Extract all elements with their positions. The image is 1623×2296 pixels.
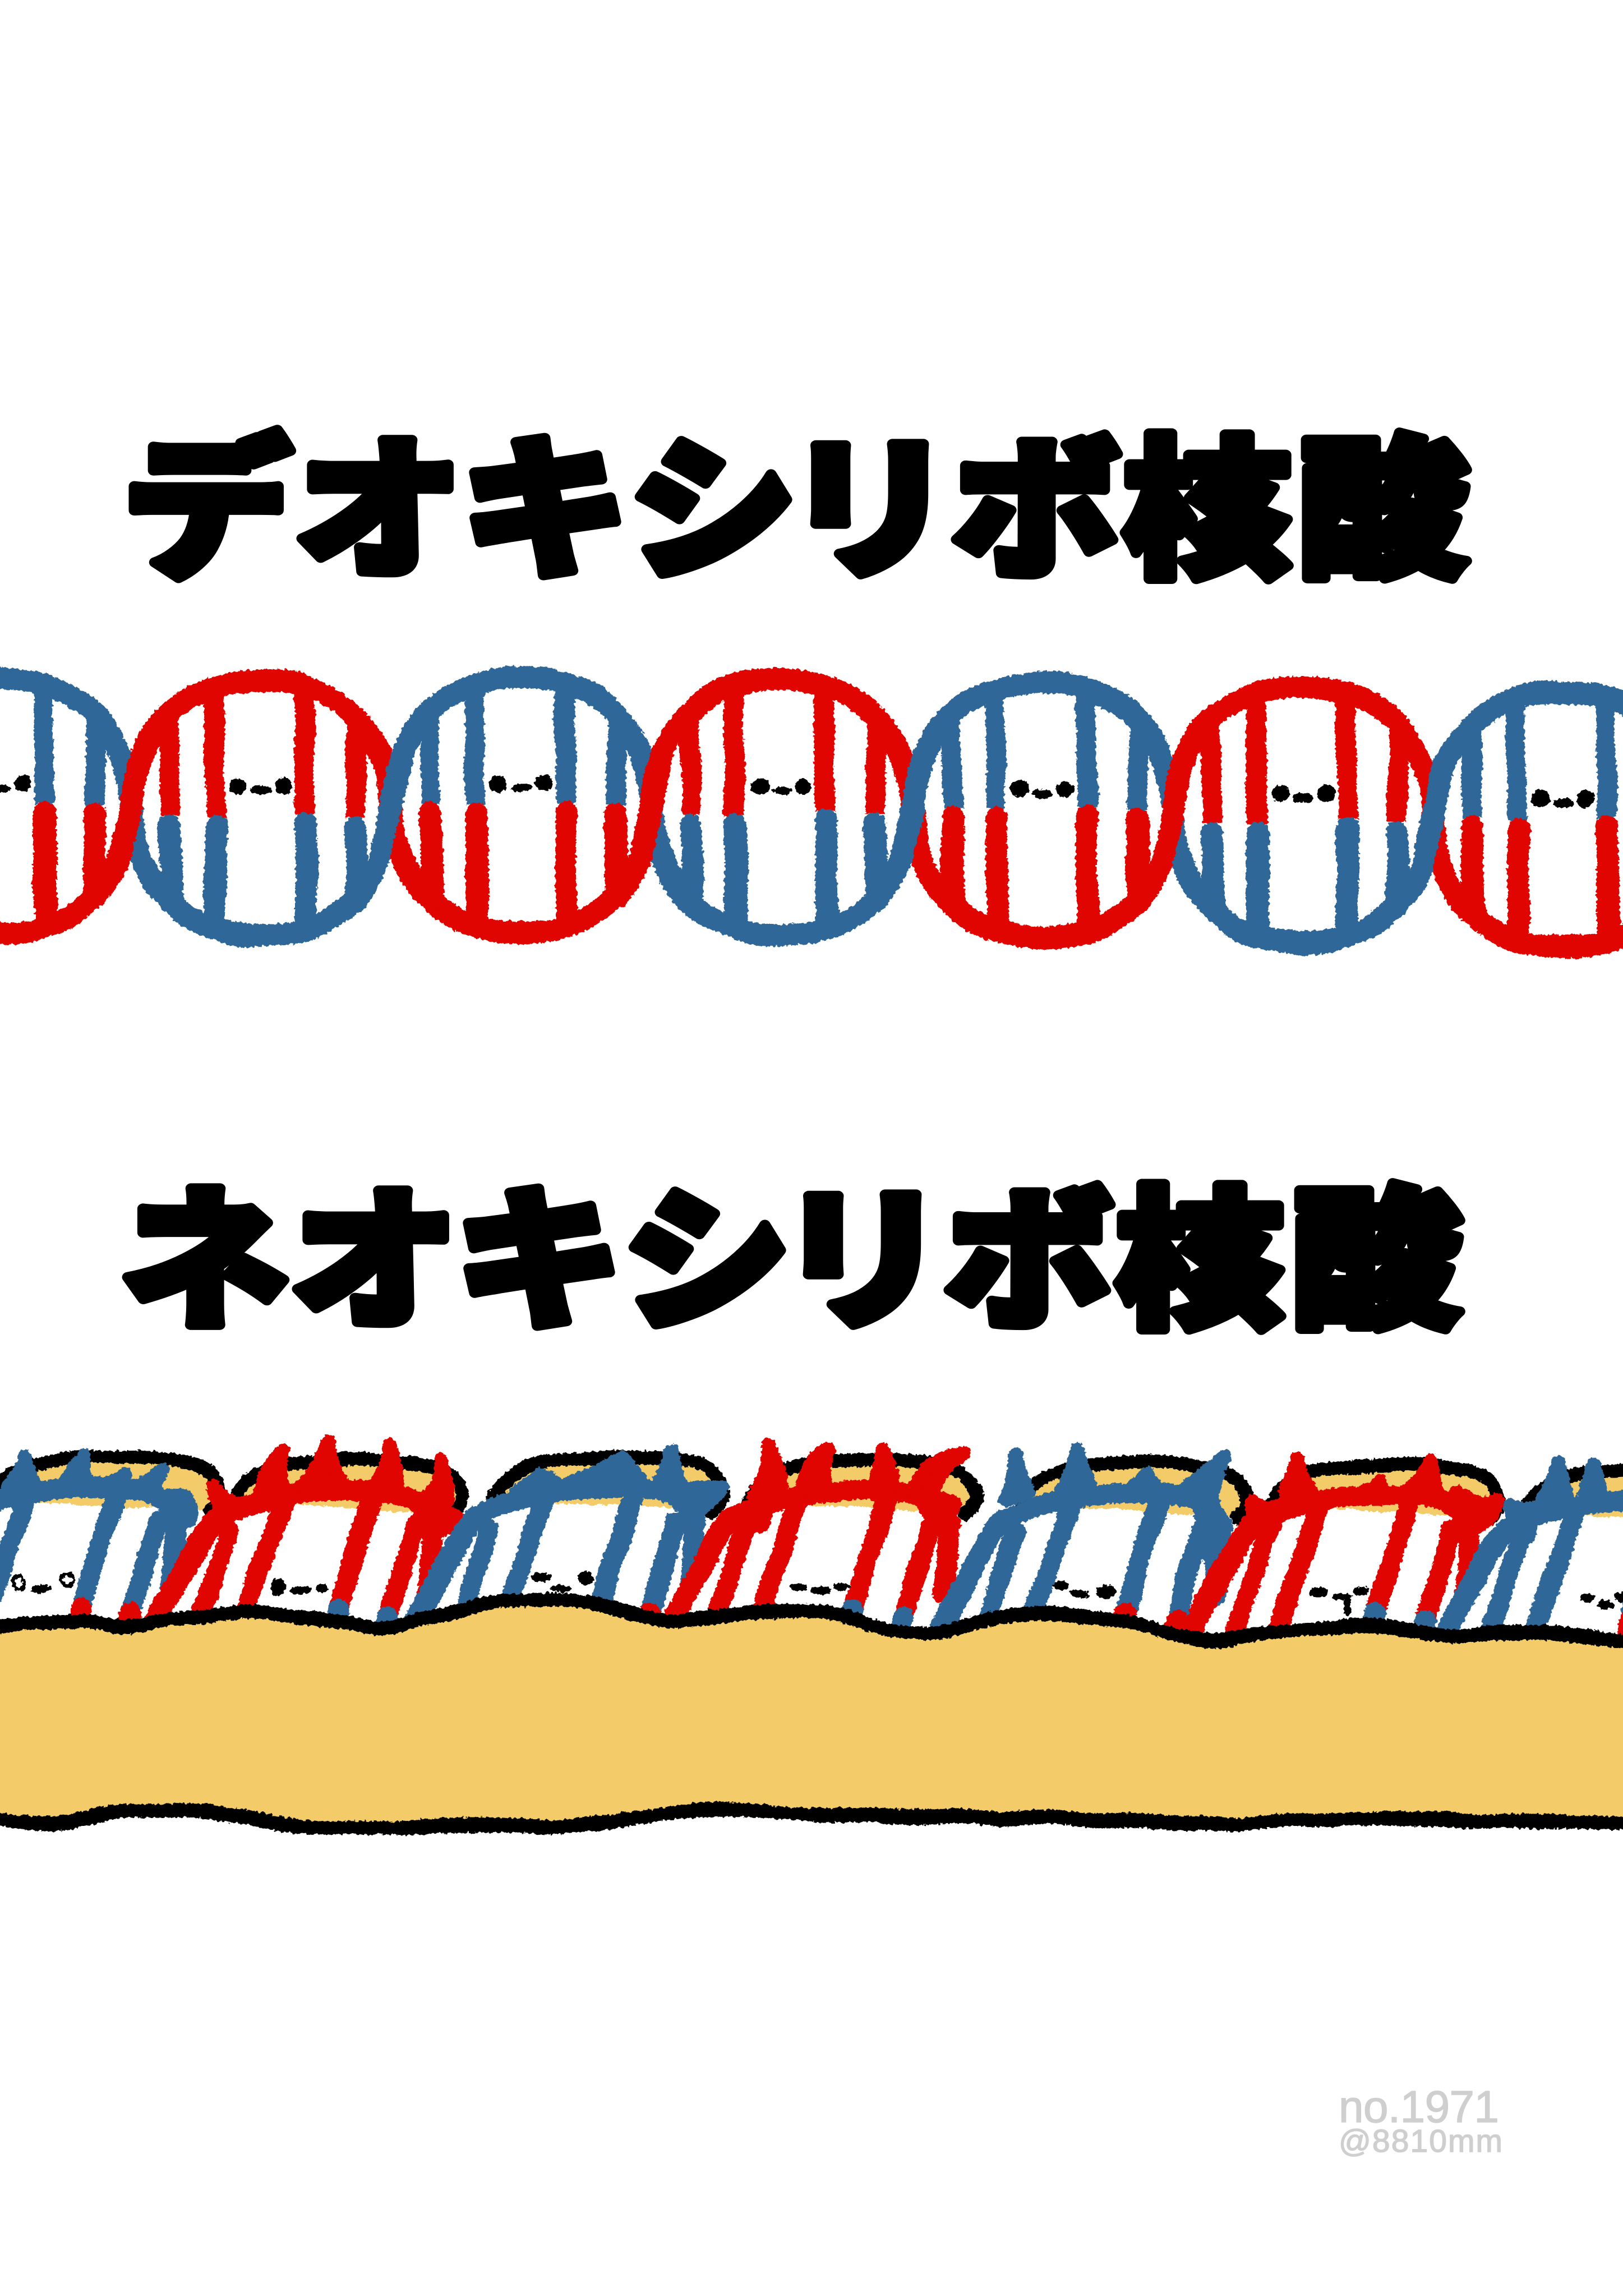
unit 6: red ladder with droopy nose face [1189, 1460, 1497, 1644]
unit 1: blue ladder with startled face [0, 1456, 190, 1637]
unit 3: blue ladder [413, 1451, 722, 1637]
helix segment 5 (blue top, red bottom) [912, 682, 1173, 938]
helix segment 3 (blue top, red bottom) [391, 677, 652, 933]
unit 2: red ladder [152, 1442, 459, 1640]
unit 4: red ladder [667, 1445, 965, 1640]
bread slab [0, 1600, 1623, 1829]
watermark [1339, 2082, 1502, 2159]
unit 5: blue ladder [939, 1450, 1226, 1642]
strand crossings [118, 751, 1445, 872]
helix segment 6 (red top, blue bottom) [1173, 687, 1433, 942]
DNA double helix strip with faces [0, 677, 1623, 947]
title: deoxyribonucleic acid: デオキシリボ核酸 [123, 426, 1468, 597]
helix segment 1 (blue top, red bottom) [0, 677, 130, 933]
sandwich of helix units on bread [0, 1442, 1623, 1829]
title: neoxyribonucleic acid: ネオキシリボ核酸 [121, 1176, 1461, 1347]
author handle: @8810mm [1339, 2123, 1502, 2159]
helix segment 4 (red top, blue bottom) [651, 679, 911, 935]
unit 7: blue ladder at right edge [1443, 1464, 1623, 1650]
issue number: no.1971 [1339, 2082, 1499, 2132]
bread crusts behind the ladders [0, 1457, 1623, 1524]
helix segment 7 (blue top, red bottom) [1433, 692, 1623, 947]
helix segment 2 (red top, blue bottom) [131, 680, 391, 936]
